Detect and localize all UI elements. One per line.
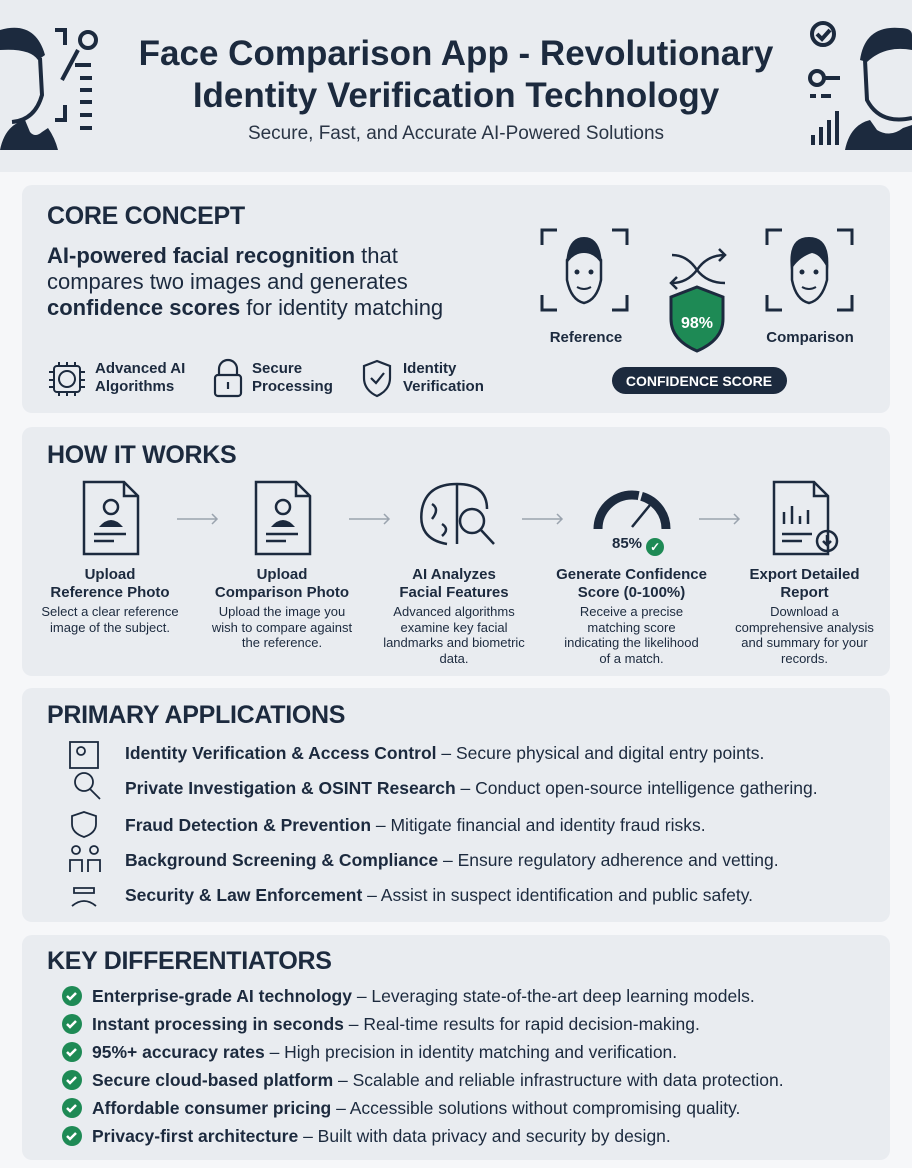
feature: secure processing: Processing	[252, 378, 333, 395]
graphic: face comparison	[540, 228, 854, 394]
application 4: Background Screening & Compliance – Ensure regulatory adherence and vetting.	[125, 850, 779, 870]
icons row	[82, 480, 838, 556]
step 3: Advanced algorithms examine key facial landmarks and biometric data.	[383, 604, 525, 666]
step 4: Generate Confidence	[556, 566, 707, 583]
label: 85%	[612, 535, 664, 556]
differentiator 3: 95%+ accuracy rates – High precision in identity matching and verification.	[92, 1042, 677, 1062]
graphic: face comparison: CONFIDENCE SCORE	[626, 373, 772, 389]
heading: core concept: CORE CONCEPT	[47, 202, 245, 230]
text block: concept description: AI-powered facial recognition that compares two images and generates confidence scores for identity matching	[47, 243, 443, 320]
application 5: Security & Law Enforcement – Assist in suspect identification and public safety.	[125, 885, 753, 905]
differentiator 6: Privacy-first architecture – Built with data privacy and security by design.	[92, 1126, 671, 1146]
icon: left face	[0, 28, 98, 150]
step 1: Reference Photo	[50, 584, 170, 601]
step 2: Upload	[257, 566, 307, 583]
differentiator 5: Affordable consumer pricing – Accessible solutions without compromising quality.	[92, 1098, 740, 1118]
title: Identity Verification Technology	[193, 76, 719, 115]
feature: advanced AI: Advanced AI	[95, 360, 185, 377]
step 3: AI Analyzes	[412, 566, 496, 583]
feature: secure processing	[214, 358, 333, 398]
step 3: Facial Features	[399, 584, 509, 601]
heading: primary applications: PRIMARY APPLICATIONS	[47, 701, 345, 729]
application 2: Private Investigation & OSINT Research – Conduct open-source intelligence gathering.	[125, 778, 818, 798]
graphic: face comparison: Comparison	[766, 329, 854, 346]
heading: how it works: HOW IT WORKS	[47, 441, 236, 469]
panel: key differentiators	[22, 935, 890, 1160]
differentiator 1: Enterprise-grade AI technology – Leveraging state-of-the-art deep learning models.	[92, 986, 755, 1006]
step 2: Comparison Photo	[215, 584, 349, 601]
differentiator 4: Secure cloud-based platform – Scalable and reliable infrastructure with data protection.	[92, 1070, 784, 1090]
label: 85%: ✓	[650, 540, 660, 554]
graphic: face comparison: 98%	[681, 315, 713, 332]
step 1: Upload	[85, 566, 135, 583]
graphic: face comparison: Reference	[550, 329, 622, 346]
feature: secure processing: Secure	[252, 360, 302, 377]
application 1: Identity Verification & Access Control – Secure physical and digital entry points.	[125, 743, 764, 763]
header	[0, 0, 912, 172]
step 2: Upload the image you wish to compare against the reference.	[212, 604, 352, 650]
title	[139, 34, 774, 115]
label: 85%: 85%	[612, 535, 642, 552]
panel: core concept	[22, 185, 890, 413]
step 3	[383, 566, 525, 666]
step 2	[212, 566, 352, 650]
step 5: Report	[780, 584, 829, 601]
icon: right face	[808, 21, 912, 150]
feature: identity verification: Identity	[403, 360, 456, 377]
panel: primary applications	[22, 688, 890, 922]
subtitle: Secure, Fast, and Accurate AI-Powered Solutions	[248, 123, 664, 144]
step 4: Receive a precise matching score indicating the likelihood of a match.	[564, 604, 699, 666]
step 1	[41, 566, 179, 634]
panel: how it works	[22, 427, 890, 676]
feature: advanced AI: Algorithms	[95, 378, 174, 395]
feature: advanced AI	[49, 360, 185, 396]
feature: identity verification: Verification	[403, 378, 484, 395]
checkmarks	[62, 986, 82, 1146]
step 5: Export Detailed	[749, 566, 860, 583]
step 5	[735, 566, 874, 666]
step 1: Select a clear reference image of the subject.	[41, 604, 179, 634]
application 3: Fraud Detection & Prevention – Mitigate financial and identity fraud risks.	[125, 815, 706, 835]
differentiator 2: Instant processing in seconds – Real-time results for rapid decision-making.	[92, 1014, 700, 1034]
icons: applications	[69, 741, 101, 907]
heading: key differentiators: KEY DIFFERENTIATORS	[47, 947, 332, 975]
step 4	[556, 566, 707, 666]
title: Face Comparison App - Revolutionary	[139, 34, 773, 73]
step 5: Download a comprehensive analysis and summary for your records.	[735, 604, 874, 666]
step 4: Score (0-100%)	[578, 584, 685, 601]
feature: identity verification	[362, 360, 484, 398]
